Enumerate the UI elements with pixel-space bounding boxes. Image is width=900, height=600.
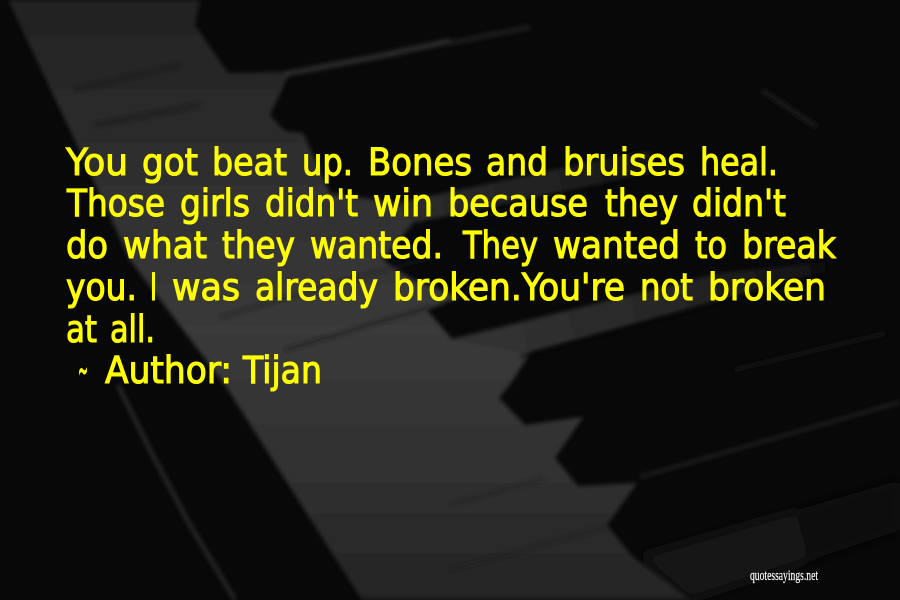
quote text: they [605, 182, 678, 225]
author attribution: Tijan [242, 349, 322, 392]
quote text: already [255, 266, 378, 309]
quote text: wanted. [310, 224, 443, 267]
quote text [65, 141, 837, 351]
quote text: heal. [700, 141, 778, 184]
quote text: got [142, 141, 198, 184]
middle key band [452, 262, 825, 353]
quote text: broken.You're [393, 266, 625, 309]
quote text: bruises [563, 141, 685, 184]
white key seams [220, 258, 430, 317]
quote text: I [150, 266, 157, 309]
quote text: not [640, 266, 693, 309]
quote text: Bones [368, 141, 472, 184]
quote text: was [172, 266, 240, 309]
quote text: They [462, 224, 538, 267]
author attribution: ~ [78, 349, 88, 392]
highlight strip lower left [118, 385, 235, 600]
quote text: what [123, 224, 207, 267]
quote text: didn't [265, 182, 358, 225]
white keys area [8, 0, 690, 600]
quote text: wanted [553, 224, 680, 267]
quote text: at [66, 308, 97, 351]
key seam highlights [285, 41, 450, 74]
quote text: break [742, 224, 837, 267]
quote text: up. [302, 141, 353, 184]
quote text: they [222, 224, 295, 267]
quote text: didn't [692, 182, 786, 225]
quote text: Those [66, 182, 165, 225]
quote text: all. [110, 308, 155, 351]
quote text: girls [180, 182, 250, 225]
quote text: win [373, 182, 433, 225]
author attribution [78, 349, 322, 392]
quote text: You [65, 141, 128, 184]
author attribution: Author: [105, 349, 232, 392]
quote text: because [448, 182, 588, 225]
quote text: do [66, 224, 108, 267]
quote text: beat [212, 141, 287, 184]
quote text: you. [66, 266, 137, 309]
upper key band [397, 150, 690, 223]
quote text: broken [708, 266, 826, 309]
lower right key band [640, 480, 900, 600]
quote text: and [486, 141, 548, 184]
watermark: quotessayings.net [750, 568, 819, 584]
quote text: to [695, 224, 727, 267]
